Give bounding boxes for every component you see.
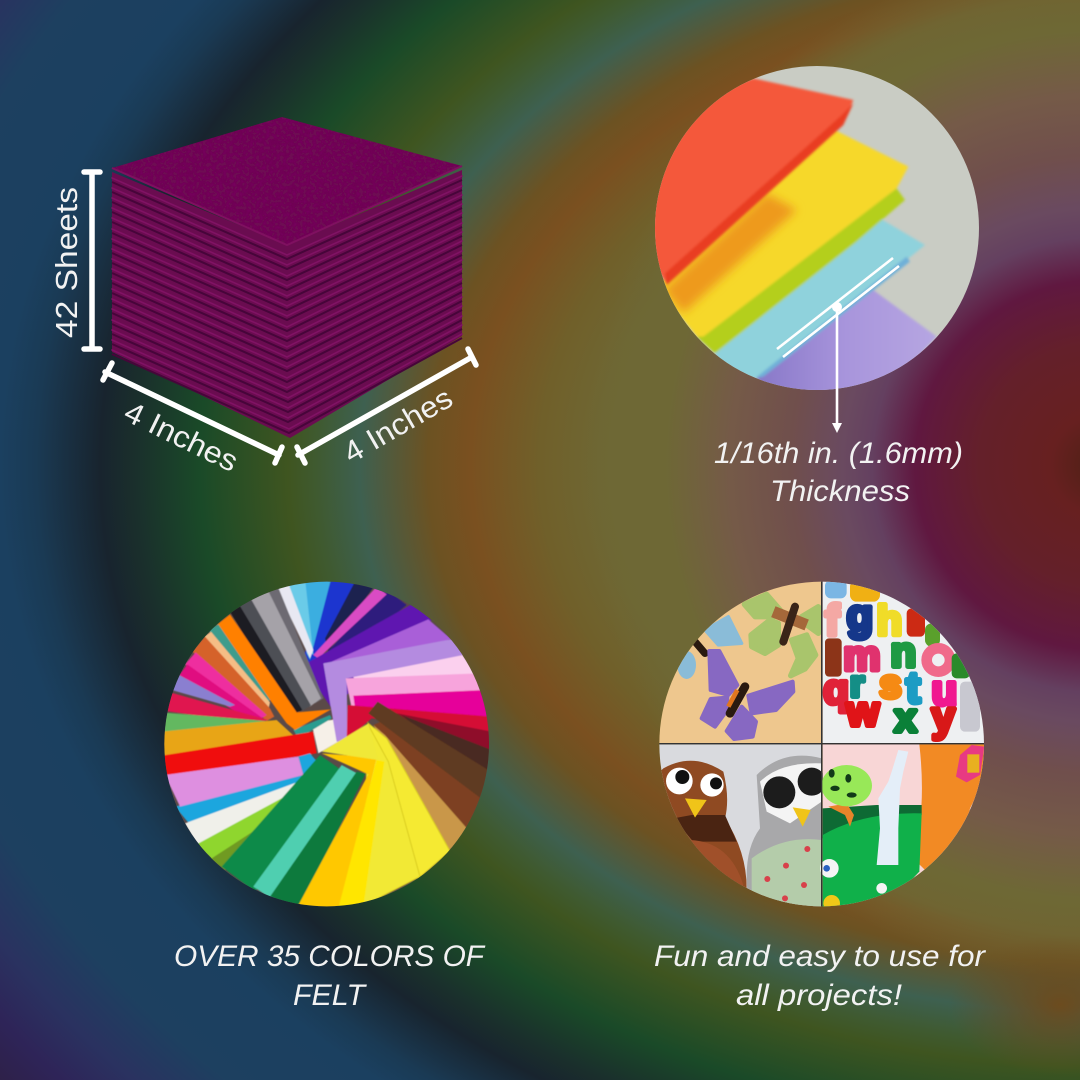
photo: felt project collage — [657, 578, 988, 912]
colors panel — [162, 577, 495, 1012]
label: 4 inches left: 4 Inches — [119, 396, 243, 479]
thickness marker lines — [777, 258, 899, 357]
collage: felt letters: g — [847, 592, 873, 640]
caption: projects — [654, 940, 986, 1012]
photo: layered felt close-up — [650, 63, 983, 397]
collage: felt letters: x — [894, 697, 917, 741]
collage dividers — [657, 578, 988, 910]
collage: felt letters: n — [891, 629, 916, 676]
label: 42 sheets: 42 Sheets — [49, 187, 84, 338]
thickness panel — [650, 63, 983, 508]
collage: felt letters: y — [932, 693, 955, 740]
label: thickness — [714, 437, 963, 508]
caption: colors: OVER 35 COLORS OF — [174, 940, 486, 973]
label: 4 inches right: 4 Inches — [338, 381, 458, 470]
collage: felt butterflies — [657, 578, 822, 743]
collage: felt letters: r — [850, 664, 864, 705]
label: thickness: 1/16th in. (1.6mm) — [714, 437, 963, 470]
collage: felt letters: t — [906, 664, 920, 712]
caption: projects: all projects! — [736, 979, 903, 1012]
marker dot — [832, 302, 842, 312]
icon: stack of felt sheets — [112, 117, 462, 438]
collage: felt owls — [657, 744, 826, 909]
felt stack panel — [49, 117, 476, 479]
collage: felt letters: h — [877, 597, 902, 644]
left width dimension line — [103, 363, 282, 463]
projects panel — [654, 578, 988, 1012]
collage: felt storybook scene — [820, 744, 988, 912]
collage: felt letters: f — [825, 597, 840, 645]
collage: felt letters: w — [846, 688, 880, 735]
right width dimension line — [297, 349, 476, 463]
collage: felt letters: s — [879, 663, 902, 707]
collage: felt letters: q — [823, 665, 849, 712]
height dimension line — [84, 172, 100, 349]
collage: felt letters — [823, 578, 988, 743]
collage: felt letters: m — [843, 632, 880, 679]
caption: colors — [174, 940, 486, 1012]
label: thickness: Thickness — [770, 475, 910, 508]
collage: felt letters: u — [932, 666, 957, 713]
arrow to thickness label — [832, 307, 842, 433]
photo: fan of colored felt — [162, 577, 495, 912]
caption: projects: Fun and easy to use for — [654, 940, 986, 973]
caption: colors: FELT — [293, 979, 368, 1012]
